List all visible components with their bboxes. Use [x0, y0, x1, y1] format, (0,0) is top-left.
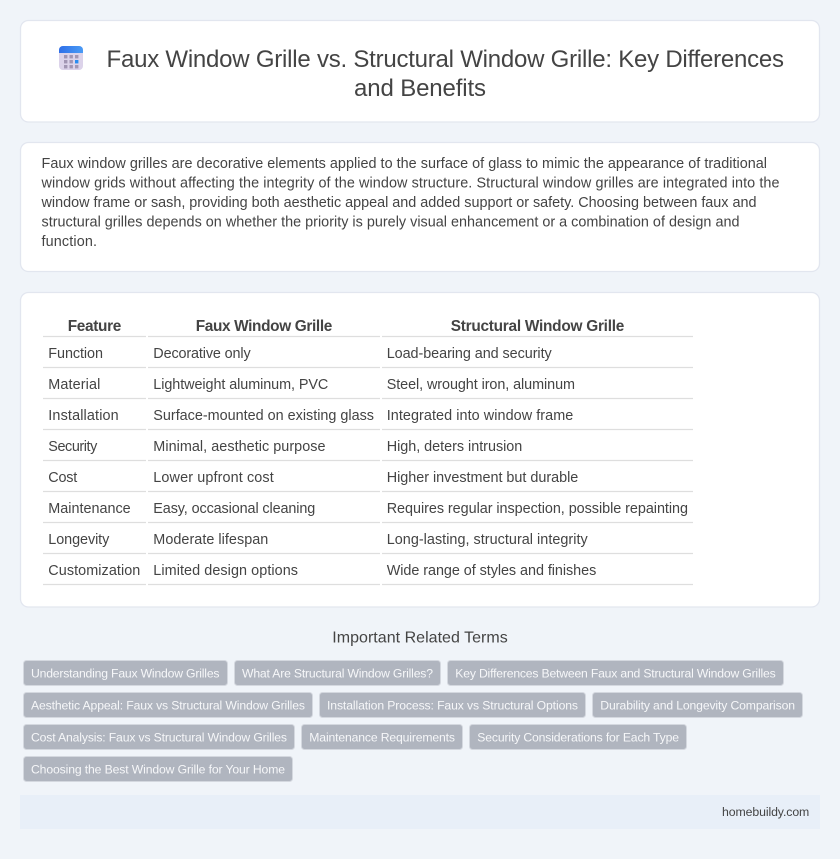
table row: security: Security: [48, 439, 98, 455]
chip: [234, 660, 440, 686]
text block: description: function.: [42, 234, 97, 250]
chip: What Are Structural Window Grilles?: [242, 666, 433, 680]
chip: Choosing the Best Window Grille for Your Home: [31, 762, 285, 776]
chip: Durability and Longevity Comparison: [600, 698, 795, 712]
title: Faux Window Grille vs. Structural Window Grille: Key Differences: [106, 46, 784, 73]
text block: description: structural grilles depends on whether the priority is purely visual enhancement or a combination of design and: [42, 214, 740, 230]
chip: [592, 692, 802, 718]
table header row: [43, 318, 693, 336]
table row: material: Lightweight aluminum, PVC: [153, 377, 328, 393]
chip: [302, 724, 462, 750]
text block: description: window frame or sash, providing both aesthetic appeal and added support or safety. Choosing between faux and: [40, 195, 756, 211]
table row: cost: [43, 470, 693, 492]
table row: material: Steel, wrought iron, aluminum: [387, 377, 575, 393]
table row: function: Decorative only: [153, 346, 251, 362]
chip: Installation Process: Faux vs Structural Options: [327, 698, 578, 712]
table row: installation: Surface-mounted on existing glass: [153, 408, 374, 424]
chip: [320, 692, 586, 718]
chip: Key Differences Between Faux and Structural Window Grilles: [455, 666, 776, 680]
chip: [24, 692, 312, 718]
title: [106, 46, 784, 102]
table row: maintenance: Easy, occasional cleaning: [153, 501, 315, 517]
chip: [24, 724, 294, 750]
table row: maintenance: Requires regular inspection, possible repainting: [387, 501, 688, 517]
panel: related term chips: [24, 660, 802, 782]
table row: function: Load-bearing and security: [387, 346, 552, 362]
chip: [448, 660, 784, 686]
chip: [470, 724, 686, 750]
table row: longevity: Long-lasting, structural integrity: [387, 532, 588, 548]
text block: description: Faux window grilles are decorative elements applied to the surface of glass to mimic the appearance of traditional: [42, 156, 767, 172]
footer: homebuildy.com: [722, 805, 809, 819]
table row: maintenance: Maintenance: [48, 501, 131, 517]
table row: customization: Customization: [48, 563, 140, 579]
table row: installation: Integrated into window frame: [387, 408, 573, 424]
table row: function: Function: [48, 346, 103, 362]
chip: Cost Analysis: Faux vs Structural Window Grilles: [31, 730, 287, 744]
table row: maintenance: [43, 501, 693, 522]
table header row: Feature: [68, 318, 122, 335]
table row: longevity: Longevity: [48, 532, 110, 548]
chip: Aesthetic Appeal: Faux vs Structural Window Grilles: [31, 698, 305, 712]
table row: customization: Wide range of styles and finishes: [387, 563, 596, 579]
chip: Security Considerations for Each Type: [477, 730, 679, 744]
table row: material: Material: [48, 377, 100, 393]
table row: cost: Lower upfront cost: [153, 470, 274, 486]
footer: [20, 795, 820, 829]
table row: customization: [43, 563, 693, 584]
table row: security: High, deters intrusion: [387, 439, 522, 455]
table row: installation: Installation: [48, 408, 119, 424]
chip: Understanding Faux Window Grilles: [31, 666, 220, 680]
table header row: Faux Window Grille: [196, 318, 333, 335]
table header row: Structural Window Grille: [451, 318, 625, 335]
table row: security: Minimal, aesthetic purpose: [153, 439, 326, 455]
table row: customization: Limited design options: [153, 563, 298, 579]
icon: calendar: [59, 46, 83, 70]
table row: security: [43, 439, 693, 460]
chip: [24, 756, 292, 782]
table row: cost: Cost: [48, 470, 77, 486]
table row: longevity: [43, 532, 693, 554]
panel: comparison table: [20, 292, 820, 607]
heading: related terms: Important Related Terms: [332, 630, 508, 647]
table row: material: [43, 377, 693, 398]
panel: intro paragraph: [20, 142, 820, 272]
chip: Maintenance Requirements: [309, 730, 455, 744]
title: and Benefits: [354, 75, 486, 102]
table row: installation: [43, 408, 693, 430]
chip: [24, 660, 228, 686]
panel: title header: [20, 20, 820, 122]
table row: cost: Higher investment but durable: [387, 470, 578, 486]
table row: longevity: Moderate lifespan: [153, 532, 268, 548]
table row: function: [43, 346, 693, 368]
text block: description: [40, 156, 780, 250]
text block: description: window grids without affecting the integrity of the window structure. Structural window grilles are integrated into the: [40, 176, 780, 192]
